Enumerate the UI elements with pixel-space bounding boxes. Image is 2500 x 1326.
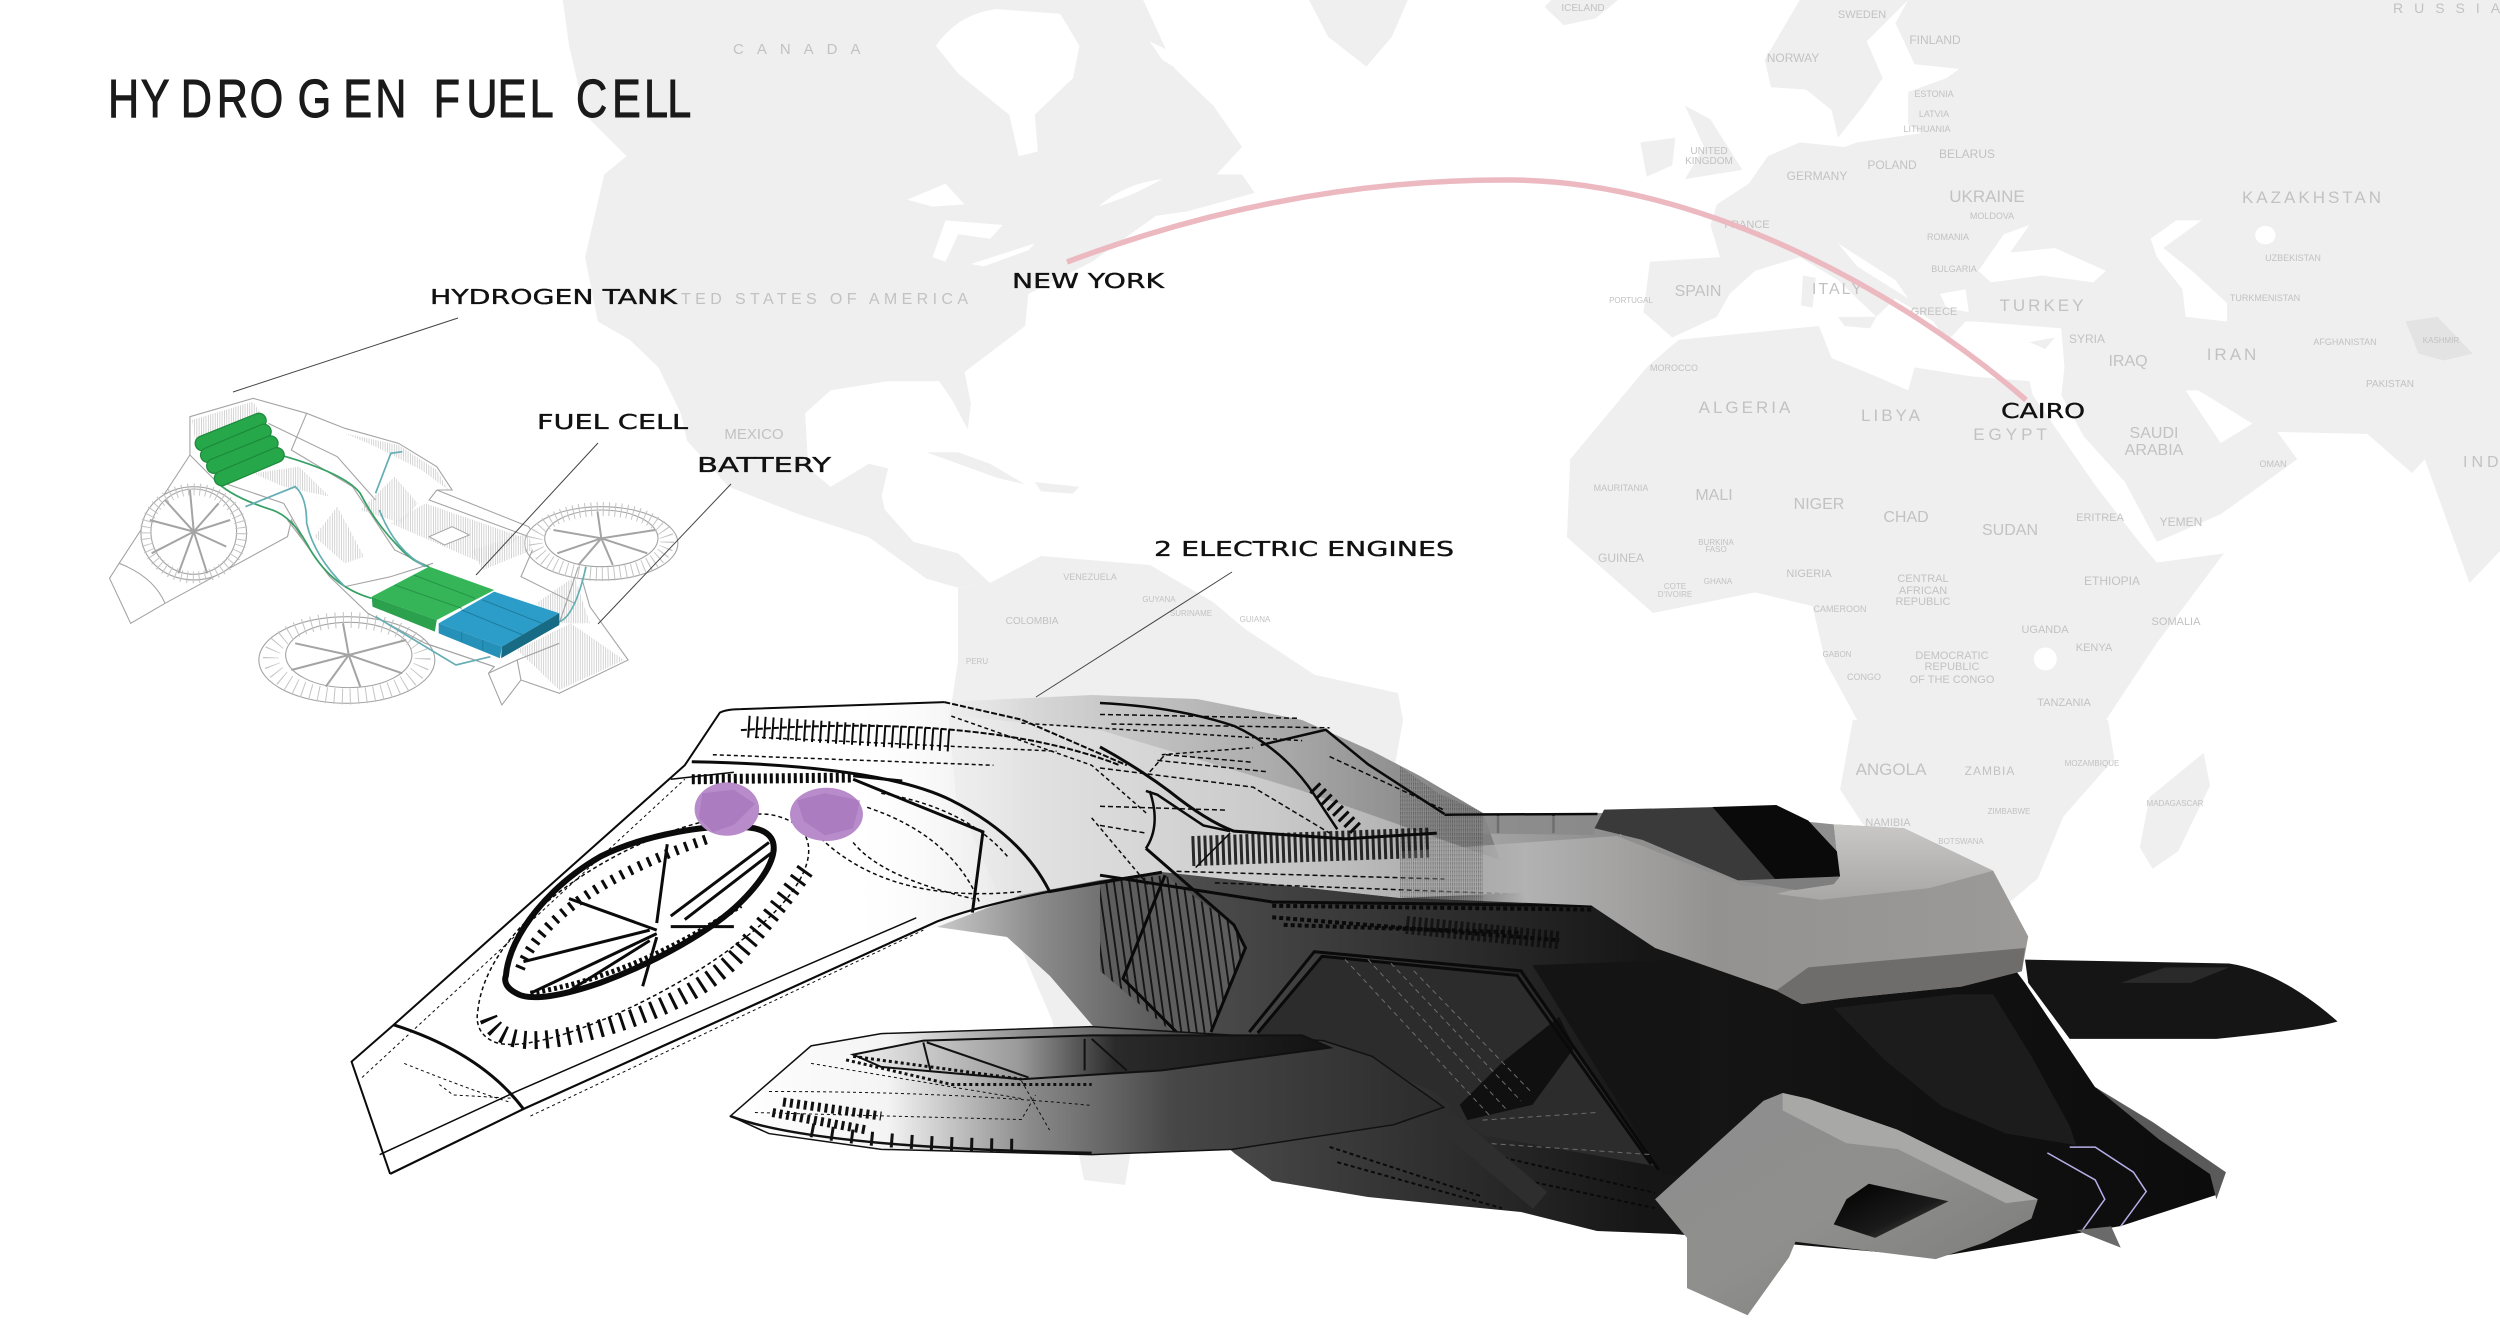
aircraft: upper fuselage surface xyxy=(720,695,1620,960)
map: country labels: MAURITANIA xyxy=(1594,483,1648,493)
map: country labels: KASHMIR xyxy=(2423,336,2459,345)
map: country labels: MOROCCO xyxy=(1650,363,1698,373)
map: country labels: ZAMBIA xyxy=(1965,764,2015,778)
map: country labels: D'IVOIRE xyxy=(1658,590,1692,599)
map: country labels: AFGHANISTAN xyxy=(2313,337,2377,347)
route arc: New York to Cairo xyxy=(1067,180,2026,400)
map: country labels: ETHIOPIA xyxy=(2084,574,2140,588)
map: country labels: ICELAND xyxy=(1561,3,1605,14)
label: hydrogen tank: HYDROGEN TANK xyxy=(430,285,678,309)
label: new york: NEW YORK xyxy=(1012,269,1165,293)
map: North America xyxy=(563,0,1408,588)
map: country labels: KINGDOM xyxy=(1685,156,1733,167)
aircraft: rear wing xyxy=(2025,960,2338,1039)
map: country labels: SURINAME xyxy=(1170,609,1212,618)
map: country labels: LATVIA xyxy=(1919,109,1949,119)
body side window xyxy=(1257,956,1655,1166)
map: country labels: GUIANA xyxy=(1240,615,1271,624)
map: country labels: ITALY xyxy=(1812,281,1864,298)
label: cairo: CAIRO xyxy=(2001,399,2085,423)
leader line: hydrogen tank xyxy=(233,318,458,392)
map: country labels: UKRAINE xyxy=(1949,187,2025,206)
map: country labels: IRAN xyxy=(2207,345,2259,364)
map: country labels: BOTSWANA xyxy=(1938,837,1984,846)
rear: intake opening xyxy=(1834,1184,1949,1238)
rear: lower tail xyxy=(2076,1226,2121,1248)
hatched strut panel xyxy=(1100,875,1245,1036)
map: country labels: UZBEKISTAN xyxy=(2265,253,2321,263)
aircraft: rear section in rendered shading xyxy=(1400,766,2226,1315)
map: country labels: UGANDA xyxy=(2021,624,2069,636)
map: country labels: ANGOLA xyxy=(1856,760,1927,779)
map: country labels: MOZAMBIQUE xyxy=(2065,759,2119,768)
map: country labels: CANADA xyxy=(733,41,874,58)
aircraft: upper edge shading xyxy=(944,695,1500,860)
aircraft: mid-body detail xyxy=(1100,848,1700,1208)
map: country labels: ARABIA xyxy=(2125,442,2184,459)
map: country labels: KENYA xyxy=(2076,642,2113,654)
electric engine 2 xyxy=(790,788,863,841)
map: country labels: UNITED xyxy=(1690,146,1728,157)
rear: upper shell xyxy=(1400,824,2028,1004)
map: country labels xyxy=(681,0,2500,846)
left fan xyxy=(141,487,247,580)
small cutaway diagram xyxy=(110,398,678,705)
map: country labels: AFRICAN xyxy=(1899,585,1947,597)
electric engine 1 xyxy=(695,782,759,836)
rear: nose accent lines xyxy=(2047,1147,2146,1230)
aircraft: dark lower body xyxy=(937,872,2223,1257)
map: country labels: ROMANIA xyxy=(1927,232,1969,242)
map: country labels: PERU xyxy=(966,657,988,666)
map: country labels: SUDAN xyxy=(1982,522,2038,539)
rear: canopy xyxy=(1595,805,1840,890)
map: country labels: NIGERIA xyxy=(1786,568,1832,580)
rear: lower intake housing xyxy=(1655,1093,2038,1315)
map: country labels: CHAD xyxy=(1883,509,1929,526)
label: fuel cell: FUEL CELL xyxy=(537,410,689,434)
map: country labels: VENEZUELA xyxy=(1063,572,1117,582)
map: country labels: GHANA xyxy=(1704,577,1733,586)
cutaway: airframe outline xyxy=(110,398,678,705)
rear: mesh overlay fade xyxy=(1400,766,1483,902)
rear: canopy shadow base xyxy=(1617,813,1840,890)
map: country labels: YEMEN xyxy=(2160,515,2202,529)
map: country labels: SPAIN xyxy=(1675,283,1721,300)
right fan xyxy=(525,507,678,580)
map: country labels: LITHUANIA xyxy=(1903,124,1951,134)
map: country labels: DEMOCRATIC xyxy=(1915,650,1989,662)
cutaway: fuel lines xyxy=(215,452,586,665)
world map background xyxy=(563,0,2500,1185)
map: country labels: MOLDOVA xyxy=(1970,211,2014,221)
map: country labels: ALGERIA xyxy=(1699,398,1793,417)
rear: nose edge xyxy=(2095,1087,2226,1199)
cutaway: hydrogen tanks xyxy=(203,421,277,478)
map: country labels: SAUDI xyxy=(2130,425,2178,442)
map: country labels: PORTUGAL xyxy=(1609,296,1653,305)
map: country labels: COLOMBIA xyxy=(1006,616,1059,627)
map: country labels: BURKINA xyxy=(1698,538,1734,547)
map: country labels: TURKMENISTAN xyxy=(2230,293,2300,303)
map: country labels: OMAN xyxy=(2260,459,2286,469)
aircraft: lower fan ring xyxy=(730,1027,1444,1155)
map: country labels: CENTRAL xyxy=(1897,573,1949,585)
map: country labels: GREECE xyxy=(1911,306,1957,318)
map: country labels: ESTONIA xyxy=(1914,89,1954,99)
map: Eurasia and Africa xyxy=(1545,0,2500,720)
map: country labels: SYRIA xyxy=(2069,332,2105,346)
map: country labels: TED STATES OF AMERICA xyxy=(681,291,968,308)
leader line: electric engines xyxy=(1036,572,1232,697)
rear: shell top lighter panel xyxy=(1776,824,1993,900)
leader line: fuel cell xyxy=(476,443,598,575)
aircraft: fuselage wireframe detail xyxy=(1100,703,1598,894)
map: country labels: GABON xyxy=(1823,650,1852,659)
rear: recessed bay xyxy=(1834,994,2076,1145)
map: country labels: EGYPT xyxy=(1973,425,2051,444)
dark right flank xyxy=(1532,959,1700,1178)
title: HYDROGEN FUEL CELL xyxy=(108,70,691,129)
map: country labels: MADAGASCAR xyxy=(2147,799,2204,808)
map: country labels: CONGO xyxy=(1847,672,1881,682)
cutaway: fuel cell block xyxy=(372,567,494,632)
map: country labels: FINLAND xyxy=(1909,33,1961,47)
map: country labels: GUINEA xyxy=(1598,551,1644,565)
map: country labels: MALI xyxy=(1695,487,1733,504)
map: country labels: NIGER xyxy=(1794,496,1844,513)
map: country labels: POLAND xyxy=(1867,158,1917,172)
map: country labels: TANZANIA xyxy=(2037,697,2091,709)
map: country labels: TURKEY xyxy=(2000,296,2086,315)
map: country labels: NAMIBIA xyxy=(1865,817,1911,829)
cutaway: battery block xyxy=(439,592,559,658)
map: country labels: ZIMBABWE xyxy=(1988,807,2030,816)
aircraft: glass strip above shell xyxy=(1452,816,1598,835)
map: country labels: BELARUS xyxy=(1939,147,1995,161)
map: country labels: OF THE CONGO xyxy=(1910,674,1995,686)
fuselage contour lines xyxy=(692,702,1302,913)
rear: intake highlight xyxy=(1783,1093,2038,1203)
aircraft: purple electric engines xyxy=(695,782,863,841)
label: 2 electric engines: 2 ELECTRIC ENGINES xyxy=(1154,537,1454,561)
map: country labels: NORWAY xyxy=(1767,51,1819,65)
bottom fan xyxy=(259,617,435,703)
rear: shell underside xyxy=(1776,948,2025,1004)
leader line: battery xyxy=(598,484,731,624)
map: country labels: LIBYA xyxy=(1861,406,1923,425)
map: country labels: COTE xyxy=(1664,582,1686,591)
map: country labels: BULGARIA xyxy=(1931,264,1977,274)
cutaway: hatched interior areas xyxy=(192,402,624,690)
map: country labels: PAKISTAN xyxy=(2366,379,2414,390)
aircraft: wing wireframe xyxy=(352,702,1302,1174)
map: country labels: CAMEROON xyxy=(1813,604,1867,614)
map: country labels: KAZAKHSTAN xyxy=(2242,188,2384,207)
map: country labels: IRAQ xyxy=(2108,353,2148,370)
main aircraft xyxy=(352,695,2338,1315)
map: South America xyxy=(949,556,1403,1185)
map: country labels: ERITREA xyxy=(2076,512,2124,524)
map: country labels: GUYANA xyxy=(1142,595,1176,604)
map: country labels: SOMALIA xyxy=(2152,616,2201,628)
map: country labels: FASO xyxy=(1705,545,1727,554)
wing fan ring xyxy=(477,814,809,1044)
dark cross brace xyxy=(1460,1017,1575,1120)
map: country labels: REPUBLIC xyxy=(1895,596,1951,608)
map: country labels: FRANCE xyxy=(1724,219,1770,231)
label: battery: BATTERY xyxy=(697,453,832,477)
map: country labels: REPUBLIC xyxy=(1924,661,1980,673)
map: southern Africa and Madagascar xyxy=(1840,720,2210,906)
map: country labels: GERMANY xyxy=(1787,169,1847,183)
map: country labels: MEXICO xyxy=(724,426,784,443)
map: country labels: SWEDEN xyxy=(1838,9,1886,21)
